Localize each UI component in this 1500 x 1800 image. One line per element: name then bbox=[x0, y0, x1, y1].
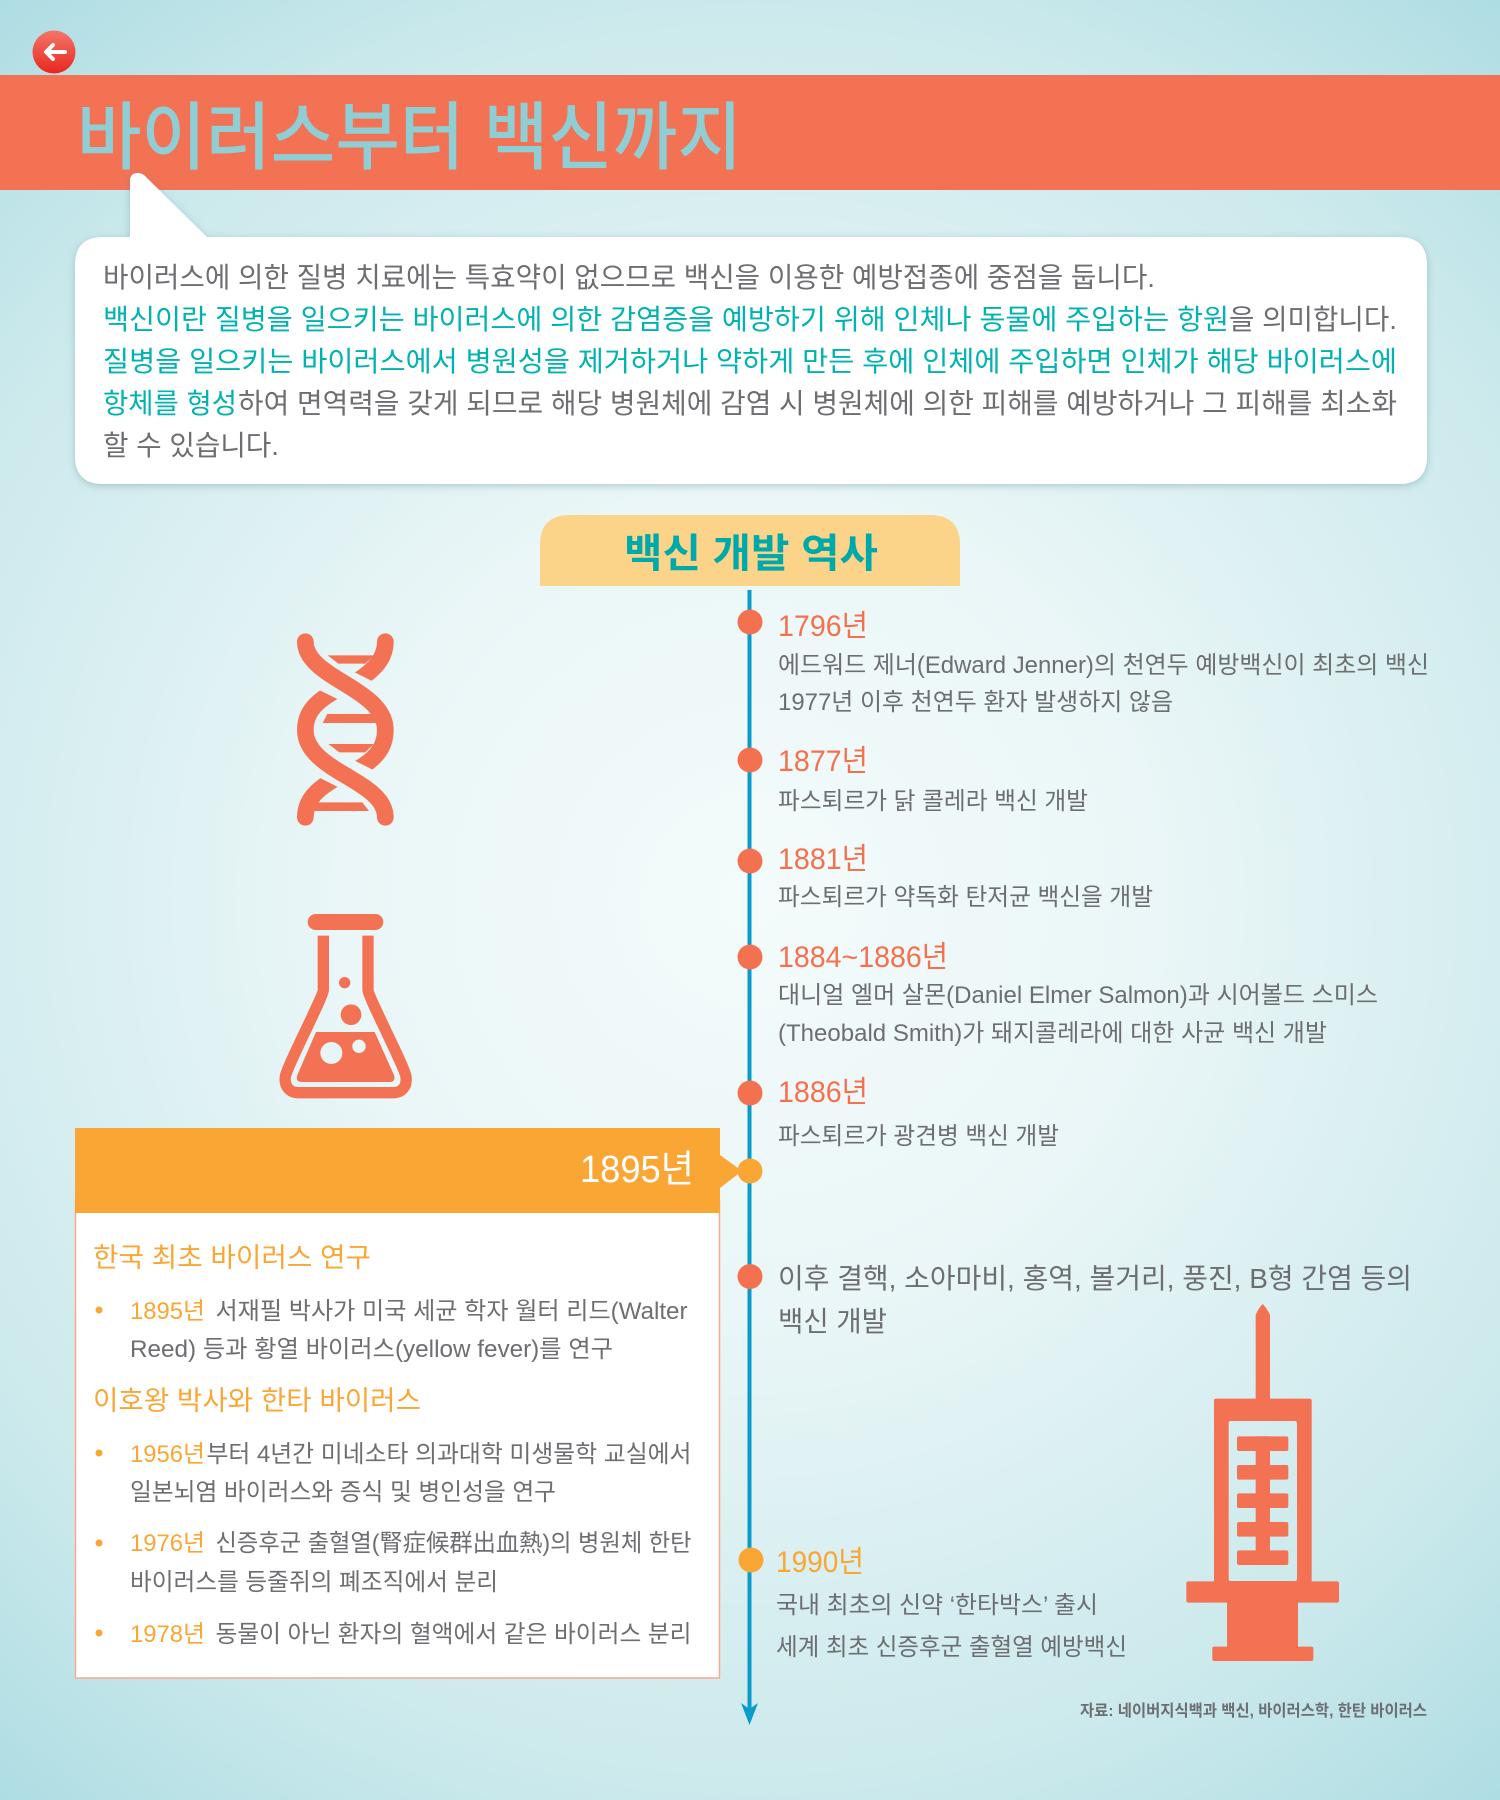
intro text: 백신이란 질병을 일으키는 바이러스에 의한 감염증을 예방하기 위해 인체나 동물에 주입하는 항원 bbox=[103, 304, 1229, 335]
timeline entry: 1990: 1990년 bbox=[776, 1546, 864, 1579]
heading tab: vaccine history bbox=[540, 515, 960, 586]
icon: flask bbox=[285, 914, 406, 1093]
timeline entry: 1884-1886: 대니얼 엘머 살몬(Daniel Elmer Salmon)과 시어볼드 스미스 bbox=[778, 982, 1378, 1009]
section: Dr. Lee Ho-wang and Hantaan virus: 일본뇌염 바이러스와 증식 및 병인성을 연구 bbox=[130, 1479, 556, 1506]
timeline entry: 1884-1886: 1884~1886년 bbox=[778, 941, 948, 974]
intro text: 질병을 일으키는 바이러스에서 병원성을 제거하거나 약하게 만든 후에 인체에 주입하면 인체가 해당 바이러스에 bbox=[103, 346, 1397, 377]
heading tab: vaccine history: 백신 개발 역사 bbox=[624, 532, 878, 576]
timeline entry: later vaccines bbox=[738, 1263, 1412, 1337]
timeline entry: 1877: 1877년 bbox=[778, 745, 868, 778]
timeline entry: later vaccines: 이후 결핵, 소아마비, 홍역, 볼거리, 풍진, B형 간염 등의 bbox=[778, 1263, 1412, 1294]
timeline entry: 1884-1886 bbox=[738, 941, 1378, 1047]
icon: syringe bbox=[1186, 1304, 1339, 1661]
timeline entry: 1886: 파스퇴르가 광견병 백신 개발 bbox=[778, 1123, 1059, 1150]
title banner bbox=[0, 75, 1500, 190]
timeline entry: 1884-1886: (Theobald Smith)가 돼지콜레라에 대한 사균 백신 개발 bbox=[778, 1020, 1327, 1047]
source note: 자료: 네이버지식백과 백신, 바이러스학, 한탄 바이러스 bbox=[1080, 1702, 1427, 1720]
intro text: 하여 면역력을 갖게 되므로 해당 병원체에 감염 시 병원체에 의한 피해를 예방하거나 그 피해를 최소화 bbox=[238, 388, 1397, 419]
section: Dr. Lee Ho-wang and Hantaan virus: 1978년 bbox=[130, 1621, 205, 1648]
intro text: 을 의미합니다. bbox=[1229, 304, 1397, 335]
section: Dr. Lee Ho-wang and Hantaan virus: 신증후군 출혈열(腎症候群出血熱)의 병원체 한탄 bbox=[216, 1530, 692, 1557]
section: Dr. Lee Ho-wang and Hantaan virus: 부터 4년간 미네소타 의과대학 미생물학 교실에서 bbox=[206, 1441, 692, 1468]
icon: back button bbox=[32, 30, 76, 74]
intro text: 바이러스에 의한 질병 치료에는 특효약이 없으므로 백신을 이용한 예방접종에 중점을 둡니다. bbox=[103, 262, 1155, 293]
timeline entry: 1990: 세계 최초 신증후군 출혈열 예방백신 bbox=[776, 1634, 1127, 1661]
timeline entry: later vaccines: 백신 개발 bbox=[778, 1306, 887, 1337]
timeline entry: 1990 bbox=[738, 1546, 1127, 1661]
section: first Korean virus research bbox=[93, 1243, 688, 1363]
timeline entry: 1881: 1881년 bbox=[778, 843, 868, 876]
timeline entry: 1796: 1977년 이후 천연두 환자 발생하지 않음 bbox=[778, 689, 1173, 716]
section: Dr. Lee Ho-wang and Hantaan virus: 동물이 아닌 환자의 혈액에서 같은 바이러스 분리 bbox=[216, 1621, 692, 1648]
panel: 1895 box bbox=[75, 1128, 742, 1678]
section: first Korean virus research: Reed) 등과 황열 바이러스(yellow fever)를 연구 bbox=[130, 1336, 613, 1363]
timeline entry: 1886 bbox=[738, 1076, 1059, 1150]
timeline entry: 1886: 1886년 bbox=[778, 1076, 868, 1109]
section: first Korean virus research: 1895년 bbox=[130, 1298, 205, 1325]
section: first Korean virus research: 서재필 박사가 미국 세균 학자 월터 리드(Walter bbox=[216, 1298, 688, 1325]
panel: intro speech bubble bbox=[75, 173, 1427, 484]
section: Dr. Lee Ho-wang and Hantaan virus: 1976년 bbox=[130, 1530, 205, 1557]
1895 orange header bbox=[75, 1128, 742, 1213]
section: Dr. Lee Ho-wang and Hantaan virus: 바이러스를 등줄쥐의 폐조직에서 분리 bbox=[130, 1569, 498, 1596]
timeline entry: 1796: 에드워드 제너(Edward Jenner)의 천연두 예방백신이 최초의 백신 bbox=[778, 652, 1429, 679]
timeline entry: 1877 bbox=[738, 745, 1088, 815]
timeline entry: 1881: 파스퇴르가 약독화 탄저균 백신을 개발 bbox=[778, 884, 1153, 911]
timeline dot: 1895 bbox=[738, 1158, 762, 1184]
section: Dr. Lee Ho-wang and Hantaan virus bbox=[93, 1386, 692, 1648]
intro text bbox=[103, 262, 1397, 461]
section: first Korean virus research: 한국 최초 바이러스 연구 bbox=[93, 1243, 371, 1273]
timeline entry: 1881 bbox=[738, 843, 1153, 911]
timeline entry: 1990: 국내 최초의 신약 ‘한타박스’ 출시 bbox=[776, 1592, 1098, 1619]
icon: DNA helix bbox=[297, 633, 394, 826]
timeline entry: 1796 bbox=[738, 610, 1429, 716]
title: 바이러스부터 백신까지 bbox=[77, 96, 742, 179]
intro text: 할 수 있습니다. bbox=[103, 430, 279, 461]
timeline entry: 1877: 파스퇴르가 닭 콜레라 백신 개발 bbox=[778, 788, 1088, 815]
intro text: 항체를 형성 bbox=[103, 388, 237, 419]
section: Dr. Lee Ho-wang and Hantaan virus: 이호왕 박사와 한타 바이러스 bbox=[93, 1386, 421, 1416]
section: Dr. Lee Ho-wang and Hantaan virus: 1956년 bbox=[130, 1441, 205, 1468]
timeline entry: 1796: 1796년 bbox=[778, 610, 868, 643]
timeline axis arrow bbox=[741, 590, 758, 1725]
1895 orange header: 1895년 bbox=[580, 1149, 694, 1191]
